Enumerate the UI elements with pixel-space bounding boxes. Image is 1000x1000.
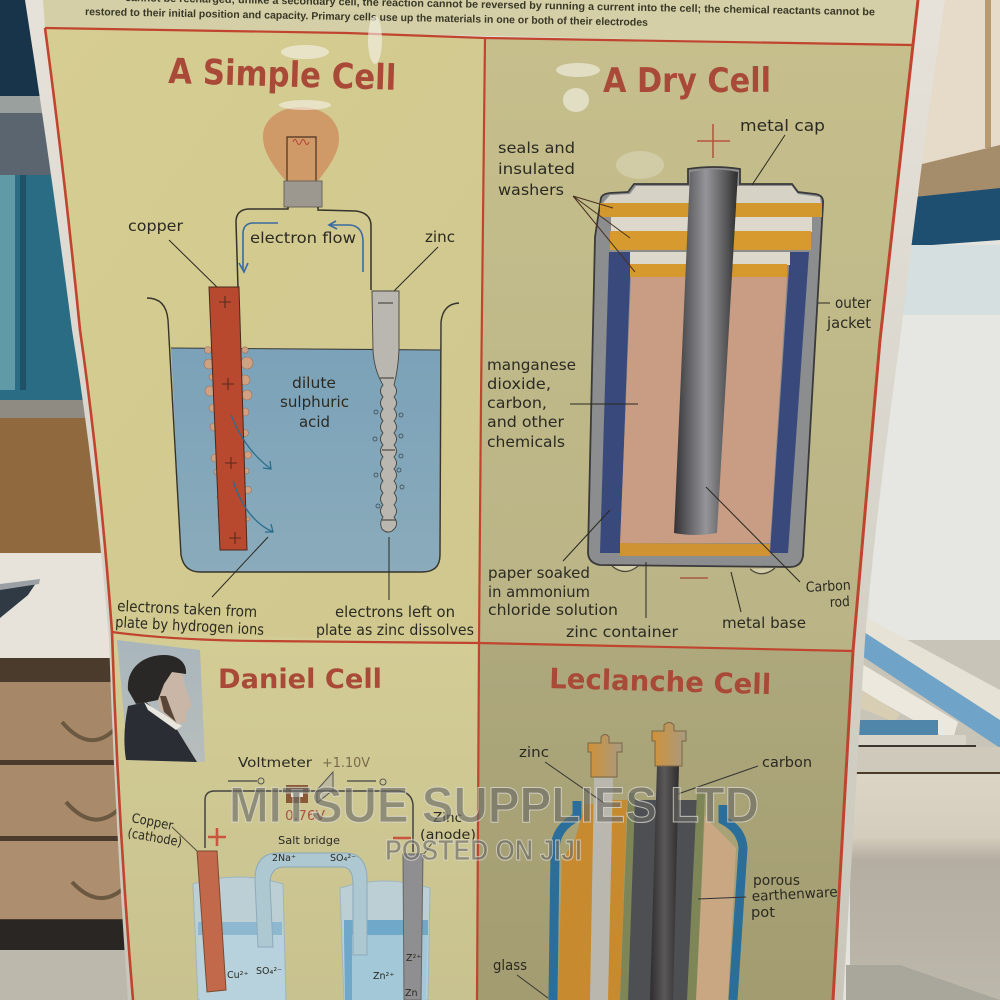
portrait	[117, 640, 205, 762]
label: glass: glass	[493, 958, 527, 974]
label: zinc container: zinc container	[566, 623, 679, 641]
gas bubbles	[204, 346, 253, 521]
label: outer jacket	[826, 294, 872, 332]
label: manganese dioxide: chemicals	[487, 433, 565, 451]
zinc electrode	[403, 854, 423, 1000]
label: minus sign	[680, 577, 708, 579]
label: electrons left on plate	[316, 603, 474, 639]
label: zinc: zinc	[425, 228, 455, 246]
cell contents	[558, 765, 736, 1000]
label: copper cathode	[126, 811, 183, 850]
label: outer jacket: outer	[835, 294, 872, 312]
watermark: POSTED ON JIJI	[385, 835, 582, 867]
label: paper soaked: in ammonium	[488, 583, 590, 601]
poster printed area: intro band	[43, 0, 918, 45]
voltmeter: Voltmeter	[238, 756, 313, 771]
panel: A Dry Cell	[487, 61, 872, 641]
salt bridge tube	[255, 853, 367, 955]
leader lines: electrons	[212, 537, 389, 600]
intro text	[85, 0, 875, 29]
copper plate	[209, 287, 247, 550]
label: minus	[393, 837, 411, 839]
ion labels: SO₄²⁻	[330, 853, 356, 864]
glare highlights	[279, 16, 664, 179]
heading: A Simple Cell: A Simple Cell	[168, 52, 397, 99]
ion labels: Cu²⁺	[227, 970, 248, 981]
carbon rod	[674, 170, 738, 535]
label: seals and insulated washers: washers	[498, 181, 564, 199]
label: electrons taken from plate	[115, 597, 265, 639]
label: paper soaked: paper soaked	[488, 564, 590, 582]
arrows: electron flow	[239, 221, 363, 272]
watermark: MITSUE SUPPLIES LTD	[229, 777, 759, 833]
zinc plate	[372, 291, 404, 532]
leader lines	[563, 135, 830, 618]
label: electron flow: electron flow	[250, 229, 356, 247]
label: manganese dioxide: manganese	[487, 356, 576, 374]
label: dilute sulphuric acid	[280, 374, 349, 431]
label: zinc anode: (anode)	[420, 828, 476, 843]
voltmeter: 0.76V	[285, 809, 325, 824]
label: electrons left on plate: plate as zinc dissolves	[316, 621, 474, 639]
leader lines	[172, 827, 432, 870]
poster printed area: daniel cell	[112, 632, 479, 1000]
label: dilute sulphuric acid: sulphuric	[280, 393, 349, 411]
copper electrode	[197, 851, 226, 992]
label: porous earthenware pot: porous	[753, 873, 800, 889]
heading: A Dry Cell: A Dry Cell	[603, 61, 771, 101]
label: porous earthenware pot	[751, 873, 838, 921]
panel: Leclanche Cell	[493, 662, 838, 1000]
label: copper: copper	[128, 217, 184, 235]
voltmeter: +1.10V	[322, 756, 370, 771]
label: manganese dioxide: dioxide,	[487, 375, 551, 393]
label: electrons left on plate: electrons left on	[335, 603, 455, 621]
label: carbon: carbon	[762, 755, 812, 771]
beaker with dilute acid	[147, 298, 459, 572]
ion labels	[227, 853, 421, 999]
ion labels: 2Na⁺	[272, 853, 296, 864]
label: manganese dioxide	[487, 356, 576, 451]
beakers	[193, 877, 430, 1000]
voltmeter	[228, 756, 386, 824]
wires	[205, 791, 413, 852]
ion labels: Z²⁺	[406, 953, 421, 964]
label: Carbon rod: rod	[829, 594, 850, 611]
label: seals and insulated washers	[498, 139, 575, 199]
label: manganese dioxide: carbon,	[487, 394, 547, 412]
label: seals and insulated washers: insulated	[498, 160, 575, 178]
label: metal cap: metal cap	[740, 116, 825, 135]
ion labels: Zn	[405, 988, 418, 999]
label: paper soaked: chloride solution	[488, 601, 618, 619]
label: porous earthenware pot: pot	[751, 905, 776, 921]
label: seals and insulated washers: seals and	[498, 139, 575, 157]
leader lines	[517, 762, 758, 998]
label: dilute sulphuric acid: acid	[299, 413, 330, 431]
panel: A Simple Cell	[115, 52, 474, 639]
label: paper soaked	[488, 564, 618, 619]
poster printed area: dry cell	[479, 38, 913, 651]
label: outer jacket: jacket	[826, 314, 871, 332]
terminal caps	[588, 722, 686, 777]
label: manganese dioxide: and other	[487, 413, 565, 431]
label: porous earthenware pot: earthenware	[751, 885, 838, 905]
label: salt bridge: Salt bridge	[278, 835, 340, 847]
label: copper cathode: Copper	[130, 811, 175, 834]
wires	[236, 207, 371, 290]
label: zinc anode	[420, 811, 476, 843]
heading: Leclanche Cell: Leclanche Cell	[549, 662, 772, 701]
label: Carbon rod	[805, 578, 851, 611]
label: Carbon rod: Carbon	[805, 578, 851, 596]
poster printed area: simple cell	[45, 28, 485, 643]
label: electrons taken from plate: plate by hydrogen ions	[115, 613, 265, 639]
leader lines: copper and zinc	[169, 240, 438, 295]
poster printed area: leclanche cell	[477, 643, 853, 1000]
heading: Daniel Cell: Daniel Cell	[218, 664, 382, 695]
label: electrons taken from plate: electrons taken from	[117, 597, 257, 621]
icon: light bulb	[263, 107, 339, 207]
watermark	[229, 777, 759, 867]
label: metal base: metal base	[722, 614, 806, 632]
intro text: restored to their initial position and capacity. Primary cells use up the materials in one or both of their electrodes	[85, 6, 648, 29]
ion labels: Zn²⁺	[373, 971, 394, 982]
battery body	[588, 167, 823, 574]
label: plus sign	[697, 124, 730, 158]
panel: Daniel Cell	[117, 640, 476, 1000]
label: zinc anode: Zinc	[433, 811, 462, 826]
label: copper cathode: (cathode)	[126, 826, 183, 850]
ion labels: SO₄²⁻	[256, 966, 282, 977]
ion arrows	[231, 415, 273, 532]
glass jar	[553, 801, 743, 1000]
label: zinc: zinc	[519, 745, 549, 761]
label: plus	[208, 828, 226, 846]
label: dilute sulphuric acid: dilute	[292, 374, 336, 392]
